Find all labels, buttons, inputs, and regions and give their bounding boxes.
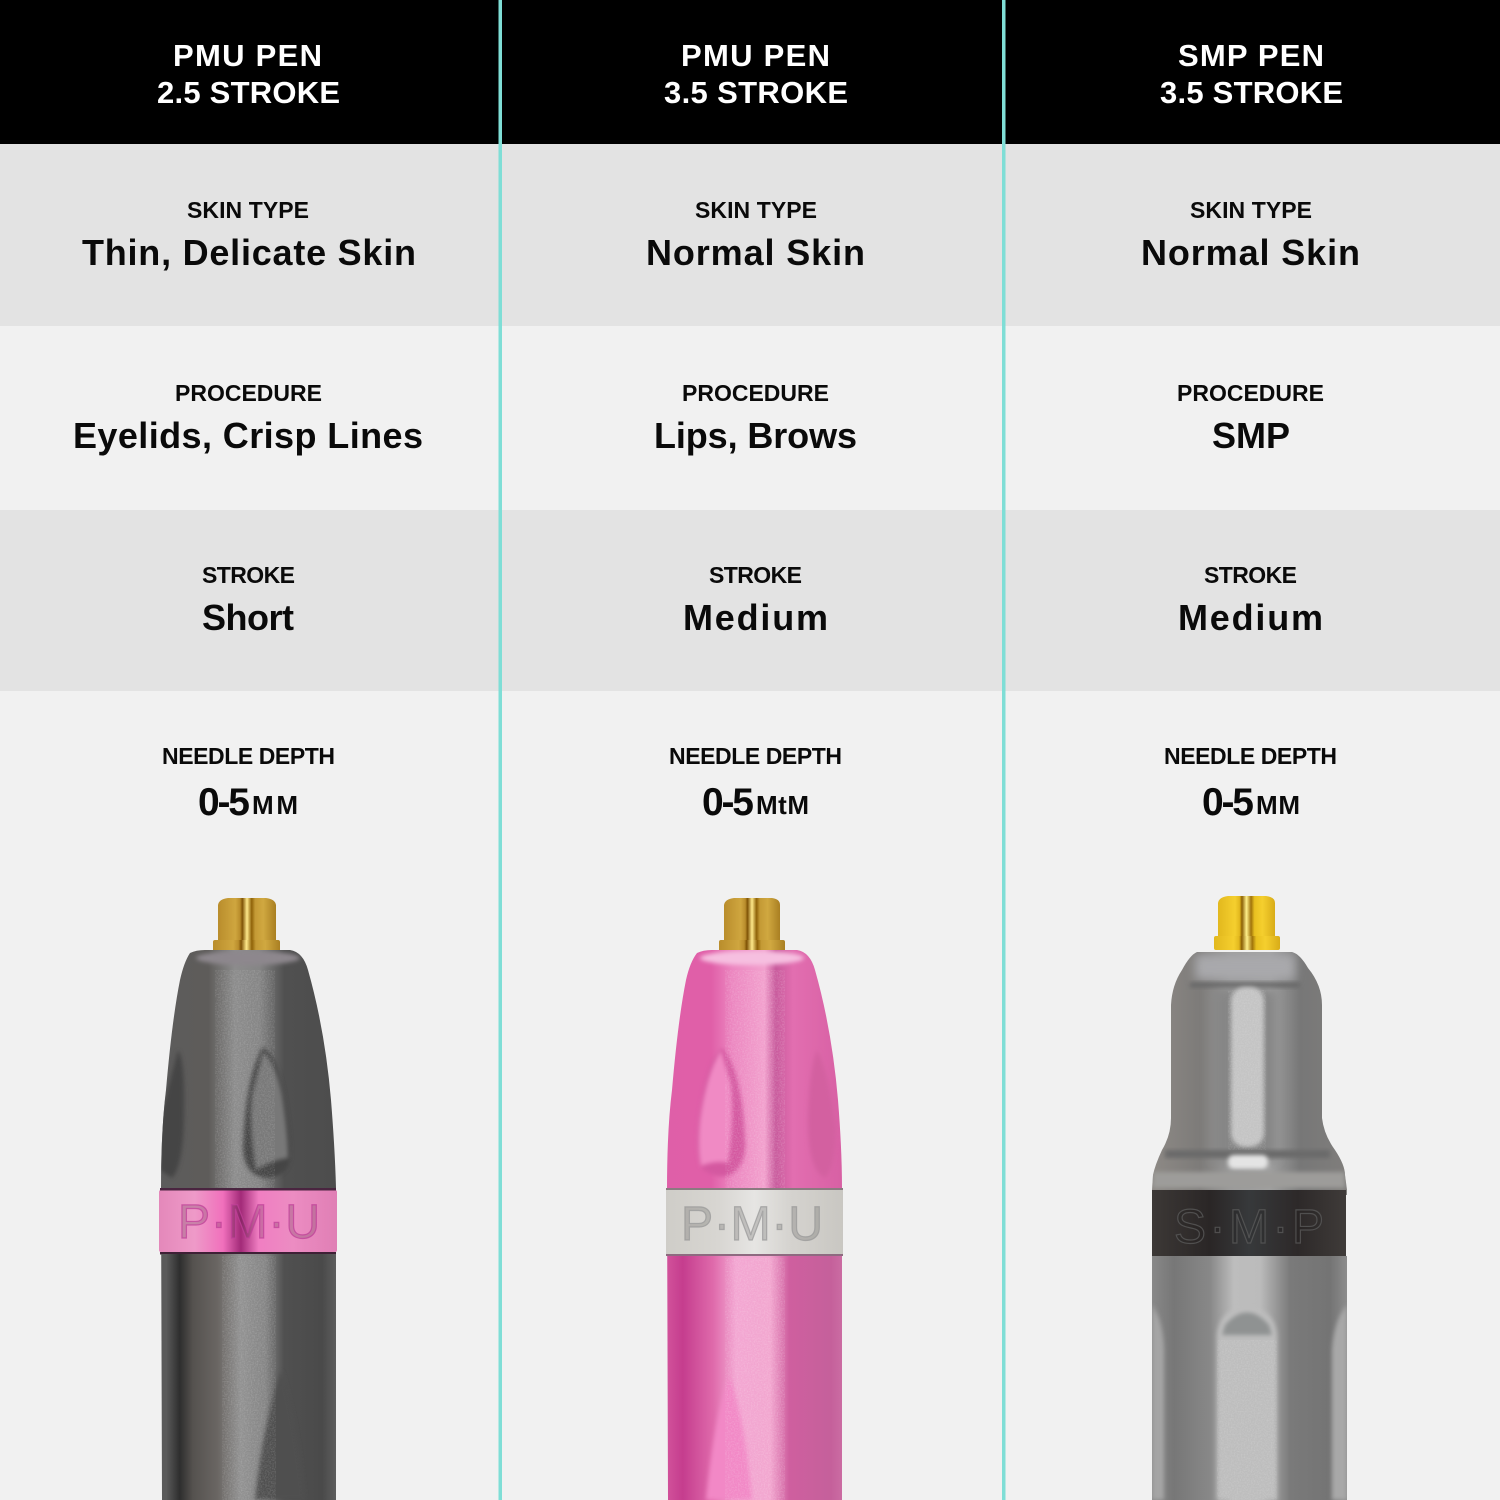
stroke: STROKE [709, 562, 802, 588]
row band: stroke [0, 510, 1500, 691]
needle depth: NEEDLE DEPTH [669, 743, 842, 769]
header bar [0, 0, 1500, 144]
heading: PMU pen 2.5 stroke: 2.5 STROKE [157, 75, 340, 110]
upper body [161, 950, 336, 1188]
needle depth [669, 743, 842, 824]
pen: dark grey PMU 2.5 [155, 898, 345, 1500]
procedure: SMP [1212, 415, 1290, 456]
stroke: Medium [1178, 597, 1323, 638]
skin type [646, 197, 865, 273]
lower body [660, 1256, 850, 1500]
stroke [1178, 562, 1323, 638]
lower body [1150, 1256, 1350, 1500]
heading: PMU pen 2.5 stroke [157, 38, 340, 110]
column 2 text [646, 38, 865, 824]
pen: grey SMP 3.5 [1150, 896, 1350, 1500]
needle depth: MM [1256, 790, 1300, 820]
pink PMU band: P·M·U [178, 1196, 320, 1249]
procedure [654, 380, 857, 456]
pen: pink PMU 3.5 [660, 898, 850, 1500]
needle depth: 0-5 [1202, 781, 1254, 824]
needle depth: NEEDLE DEPTH [162, 743, 335, 769]
procedure [1177, 380, 1324, 456]
column divider right [1002, 0, 1006, 1500]
heading: SMP pen 3.5 stroke: 3.5 STROKE [1160, 75, 1343, 110]
heading: SMP pen 3.5 stroke: SMP PEN [1178, 38, 1324, 73]
silver PMU band: P·M·U [681, 1198, 823, 1251]
column divider left [498, 0, 502, 1500]
gold tip [1214, 896, 1280, 950]
needle depth: 0-5 [702, 781, 754, 824]
procedure: Lips, Brows [654, 415, 857, 456]
upper body [1150, 945, 1350, 1195]
skin type: SKIN TYPE [187, 197, 309, 223]
heading: PMU pen 3.5 stroke: 3.5 STROKE [664, 75, 848, 110]
needle depth [1164, 743, 1337, 824]
skin type: Thin, Delicate Skin [82, 232, 416, 273]
row band: procedure [0, 326, 1500, 510]
needle depth: NEEDLE DEPTH [1164, 743, 1337, 769]
needle depth: MtM [756, 790, 809, 820]
row band: skin type [0, 144, 1500, 326]
black SMP band [1152, 1190, 1346, 1256]
gold tip [213, 898, 280, 952]
needle depth [162, 743, 335, 824]
black SMP band: S·M·P [1174, 1201, 1324, 1254]
gold tip [719, 898, 785, 952]
skin type [82, 197, 416, 273]
column 1 text [73, 38, 423, 824]
procedure: PROCEDURE [1177, 380, 1324, 406]
lower body [155, 1254, 345, 1500]
heading: PMU pen 3.5 stroke [664, 38, 848, 110]
procedure: Eyelids, Crisp Lines [73, 415, 423, 456]
stroke [202, 562, 295, 638]
heading: PMU pen 3.5 stroke: PMU PEN [681, 38, 830, 73]
skin type: SKIN TYPE [1190, 197, 1312, 223]
pink PMU band [159, 1188, 337, 1254]
procedure: PROCEDURE [175, 380, 322, 406]
stroke: STROKE [1204, 562, 1297, 588]
needle depth: MM [252, 790, 298, 820]
stroke: Short [202, 597, 294, 638]
heading: PMU pen 2.5 stroke: PMU PEN [173, 38, 322, 73]
stroke [683, 562, 828, 638]
skin type: Normal Skin [646, 232, 865, 273]
silver PMU band [666, 1188, 843, 1256]
stroke: STROKE [202, 562, 295, 588]
upper body [667, 950, 842, 1188]
skin type: Normal Skin [1141, 232, 1360, 273]
skin type: SKIN TYPE [695, 197, 817, 223]
procedure: PROCEDURE [682, 380, 829, 406]
column 3 text [1141, 38, 1360, 824]
procedure [73, 380, 423, 456]
stroke: Medium [683, 597, 828, 638]
needle depth: 0-5 [198, 781, 250, 824]
heading: SMP pen 3.5 stroke [1160, 38, 1343, 110]
skin type [1141, 197, 1360, 273]
